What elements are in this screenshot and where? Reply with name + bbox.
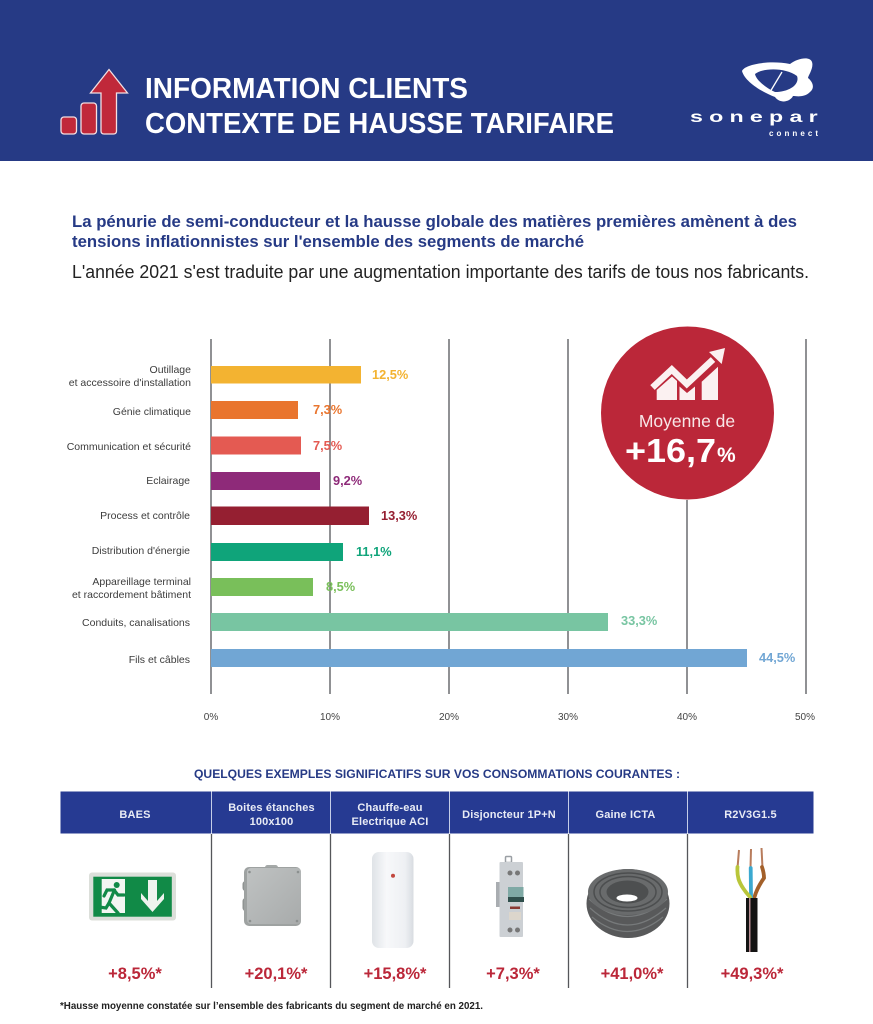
category labels: Fils et câbles (129, 654, 190, 666)
callout: average (601, 326, 774, 500)
axis labels: 50% (795, 712, 815, 723)
axis labels (204, 712, 815, 723)
table header: Electrique ACI (352, 816, 428, 828)
callout: average: % (717, 444, 736, 467)
logo: sonepar connect: connect (769, 129, 818, 138)
title (145, 73, 614, 140)
value labels: 7,3% (313, 402, 343, 417)
callout: average: +16,7 (625, 432, 716, 469)
category labels: Conduits, canalisations (82, 617, 190, 629)
percentages: +49,3%* (721, 965, 784, 983)
intro heading (72, 212, 797, 251)
axis labels: 10% (320, 712, 340, 723)
title: CONTEXTE DE HAUSSE TARIFAIRE (145, 108, 614, 140)
value labels: 12,5% (372, 367, 409, 382)
section heading: QUELQUES EXEMPLES SIGNIFICATIFS SUR VOS CONSOMMATIONS COURANTES : (194, 767, 680, 781)
value labels: 44,5% (759, 650, 796, 665)
footnote: *Hausse moyenne constatée sur l’ensemble des fabricants du segment de marché en 2021. (60, 1000, 483, 1012)
product: cable (737, 848, 764, 952)
table header: 100x100 (250, 816, 293, 828)
value labels: 7,5% (313, 438, 343, 453)
value labels: 11,1% (356, 544, 392, 559)
header banner (0, 0, 873, 161)
category labels: Outillage (150, 364, 191, 376)
logo: sonepar connect (690, 58, 818, 138)
bar chart (67, 339, 815, 723)
percentages: +15,8%* (364, 965, 427, 983)
table header: Disjoncteur 1P+N (462, 809, 556, 821)
value labels: 33,3% (621, 613, 658, 628)
table header: Chauffe-eau (357, 802, 423, 814)
icon: rising bars and arrow (61, 70, 128, 134)
logo: sonepar connect: sonepar (690, 108, 818, 126)
product: water heater (372, 852, 414, 948)
product: circuit breaker (496, 856, 524, 937)
callout: average: Moyenne de (639, 411, 735, 431)
table header: Gaine ICTA (596, 809, 655, 821)
percentages (108, 965, 784, 983)
category labels: Génie climatique (113, 406, 191, 418)
category labels (67, 364, 191, 666)
percentages: +7,3%* (486, 965, 540, 983)
percentages: +41,0%* (601, 965, 664, 983)
category labels: Process et contrôle (100, 510, 190, 522)
category labels: et raccordement bâtiment (72, 589, 191, 601)
icon: chart with arrow (652, 348, 725, 400)
value labels: 8,5% (326, 579, 356, 594)
category labels: Distribution d'énergie (92, 545, 190, 557)
category labels: et accessoire d'installation (69, 377, 191, 389)
percentages: +20,1%* (245, 965, 308, 983)
table header: R2V3G1.5 (724, 809, 777, 821)
axis labels: 20% (439, 712, 459, 723)
table header: Boites étanches (228, 802, 315, 814)
product: conduit coil (586, 869, 670, 938)
category labels: Appareillage terminal (92, 576, 191, 588)
title: INFORMATION CLIENTS (145, 73, 468, 105)
value labels: 13,3% (381, 508, 418, 523)
bars (211, 366, 747, 667)
intro heading: tensions inflationnistes sur l'ensemble des segments de marché (72, 232, 584, 251)
percentages: +8,5%* (108, 965, 162, 983)
axis labels: 0% (204, 712, 218, 723)
axis labels: 30% (558, 712, 578, 723)
value labels: 9,2% (333, 473, 363, 488)
axis labels: 40% (677, 712, 697, 723)
intro heading: La pénurie de semi-conducteur et la hausse globale des matières premières amènent à des (72, 212, 797, 231)
table: examples (60, 792, 814, 988)
table header: BAES (119, 809, 151, 821)
product: exit sign (89, 872, 176, 920)
category labels: Eclairage (146, 475, 190, 487)
category labels: Communication et sécurité (67, 441, 191, 453)
product: junction box (242, 865, 301, 926)
intro text: L'année 2021 s'est traduite par une augmentation importante des tarifs de tous nos fabricants. (72, 262, 809, 282)
value labels (313, 367, 796, 665)
table header (60, 792, 814, 834)
